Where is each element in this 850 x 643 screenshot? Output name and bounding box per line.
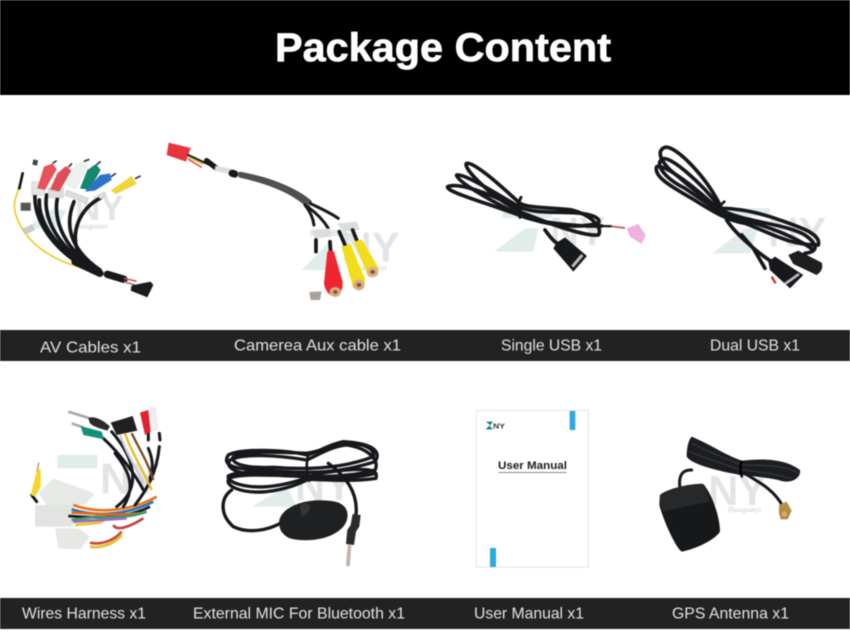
title: Package Content <box>275 26 611 70</box>
RCA plugs <box>309 239 379 300</box>
barrel jack <box>788 251 822 275</box>
logo <box>486 422 505 430</box>
red connector <box>167 143 191 162</box>
item: single USB <box>448 163 646 272</box>
antenna puck <box>659 484 720 552</box>
watermark: Zhangnanyi <box>728 506 761 514</box>
label: External MIC For Bluetooth x1 <box>193 606 405 622</box>
pink connector <box>627 224 646 244</box>
USB plug <box>768 257 803 288</box>
label: AV Cables x1 <box>40 340 141 356</box>
plugs <box>68 412 90 418</box>
item: external microphone <box>223 442 377 567</box>
item: GPS antenna <box>659 437 800 552</box>
label: User Manual x1 <box>474 606 584 622</box>
watermark: Zhangnanyi <box>353 264 387 272</box>
watermark <box>27 189 124 231</box>
watermark: NY <box>768 209 826 256</box>
accent strip <box>570 411 575 430</box>
watermark <box>252 462 353 509</box>
item: dual USB <box>656 147 826 288</box>
watermark: NY <box>295 462 353 509</box>
logo: NY <box>493 423 505 430</box>
caption band: row 1 <box>0 330 850 361</box>
label: Single USB x1 <box>501 338 602 354</box>
label: Camerea Aux cable x1 <box>234 338 401 354</box>
watermark <box>494 210 606 254</box>
item: camera aux cable <box>167 143 400 300</box>
watermark: NY <box>75 189 124 228</box>
mic body <box>279 500 348 540</box>
coil mass <box>687 437 800 482</box>
label: Dual USB x1 <box>710 338 800 354</box>
watermark: NY <box>100 455 160 503</box>
item: wires harness <box>31 407 160 549</box>
white connectors <box>38 478 95 505</box>
watermark <box>302 224 400 272</box>
watermark <box>712 208 826 256</box>
connector <box>131 282 153 297</box>
accent strip <box>490 548 496 567</box>
watermark: NY <box>708 467 766 514</box>
watermark: NY <box>550 210 606 254</box>
watermark: hangnanyi <box>78 223 107 231</box>
black block <box>111 416 137 435</box>
header banner <box>0 0 850 95</box>
item: user manual <box>476 410 588 567</box>
label: GPS Antenna x1 <box>672 606 789 622</box>
manual title: User Manual <box>498 460 567 472</box>
USB plug <box>553 237 587 272</box>
plug <box>346 514 361 545</box>
SMA connector <box>779 502 792 519</box>
watermark <box>57 455 160 503</box>
caption band: row 2 <box>0 598 850 629</box>
watermark: NY <box>342 224 400 271</box>
label: Wires Harness x1 <box>22 606 146 622</box>
item: AV cables <box>14 159 153 297</box>
RCA plugs <box>37 159 141 194</box>
